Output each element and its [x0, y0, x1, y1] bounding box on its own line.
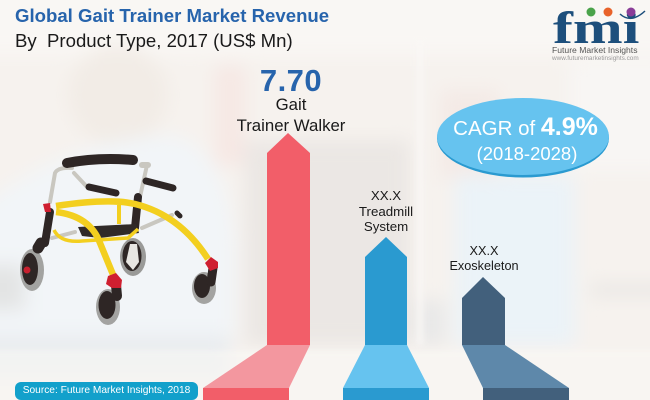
- label: Exoskeleton: Exoskeleton: [449, 259, 519, 273]
- red joints: [43, 203, 218, 288]
- label: Treadmill System: System: [364, 219, 408, 234]
- value label: 7.70: 7.70: [260, 63, 322, 98]
- callout: CAGR ellipse: (2018-2028): [477, 143, 577, 164]
- label: Gait Trainer Walker: Trainer Walker: [237, 116, 345, 134]
- bar: Treadmill System: [343, 237, 429, 400]
- seat: [78, 224, 139, 238]
- logo name: Future Market Insights: [552, 45, 638, 55]
- logo dots: [586, 8, 646, 20]
- label: Treadmill System: Treadmill: [359, 204, 413, 218]
- icon: gait trainer walker: [20, 159, 218, 325]
- callout: CAGR ellipse: [437, 98, 609, 178]
- label: Gait Trainer Walker: Gait: [276, 95, 306, 114]
- grey tubes: [50, 165, 172, 238]
- label: Exoskeleton: XX.X: [470, 244, 498, 258]
- bar: Exoskeleton: [462, 277, 569, 400]
- label: Treadmill System: XX.X: [371, 188, 401, 203]
- bar: Gait Trainer Walker: [203, 133, 310, 400]
- dark frame parts: [38, 159, 213, 296]
- logo url: www.futuremarketinsights.com: [552, 55, 639, 62]
- callout: CAGR ellipse: CAGR of 4.9%: [453, 113, 598, 141]
- subtitle: By Product Type, 2017 (US$ Mn): [15, 30, 293, 51]
- logo: fmi: [552, 2, 646, 62]
- yellow frame: [54, 201, 208, 277]
- label: Exoskeleton: [449, 244, 519, 273]
- wheels: [20, 238, 216, 325]
- title: Global Gait Trainer Market Revenue: [15, 5, 329, 26]
- source tag: [15, 382, 198, 400]
- label: Treadmill System: [359, 188, 413, 234]
- logo letters: fmi: [553, 2, 639, 52]
- label: Gait Trainer Walker: [237, 95, 346, 134]
- source tag: Source: Future Market Insights, 2018: [23, 385, 190, 396]
